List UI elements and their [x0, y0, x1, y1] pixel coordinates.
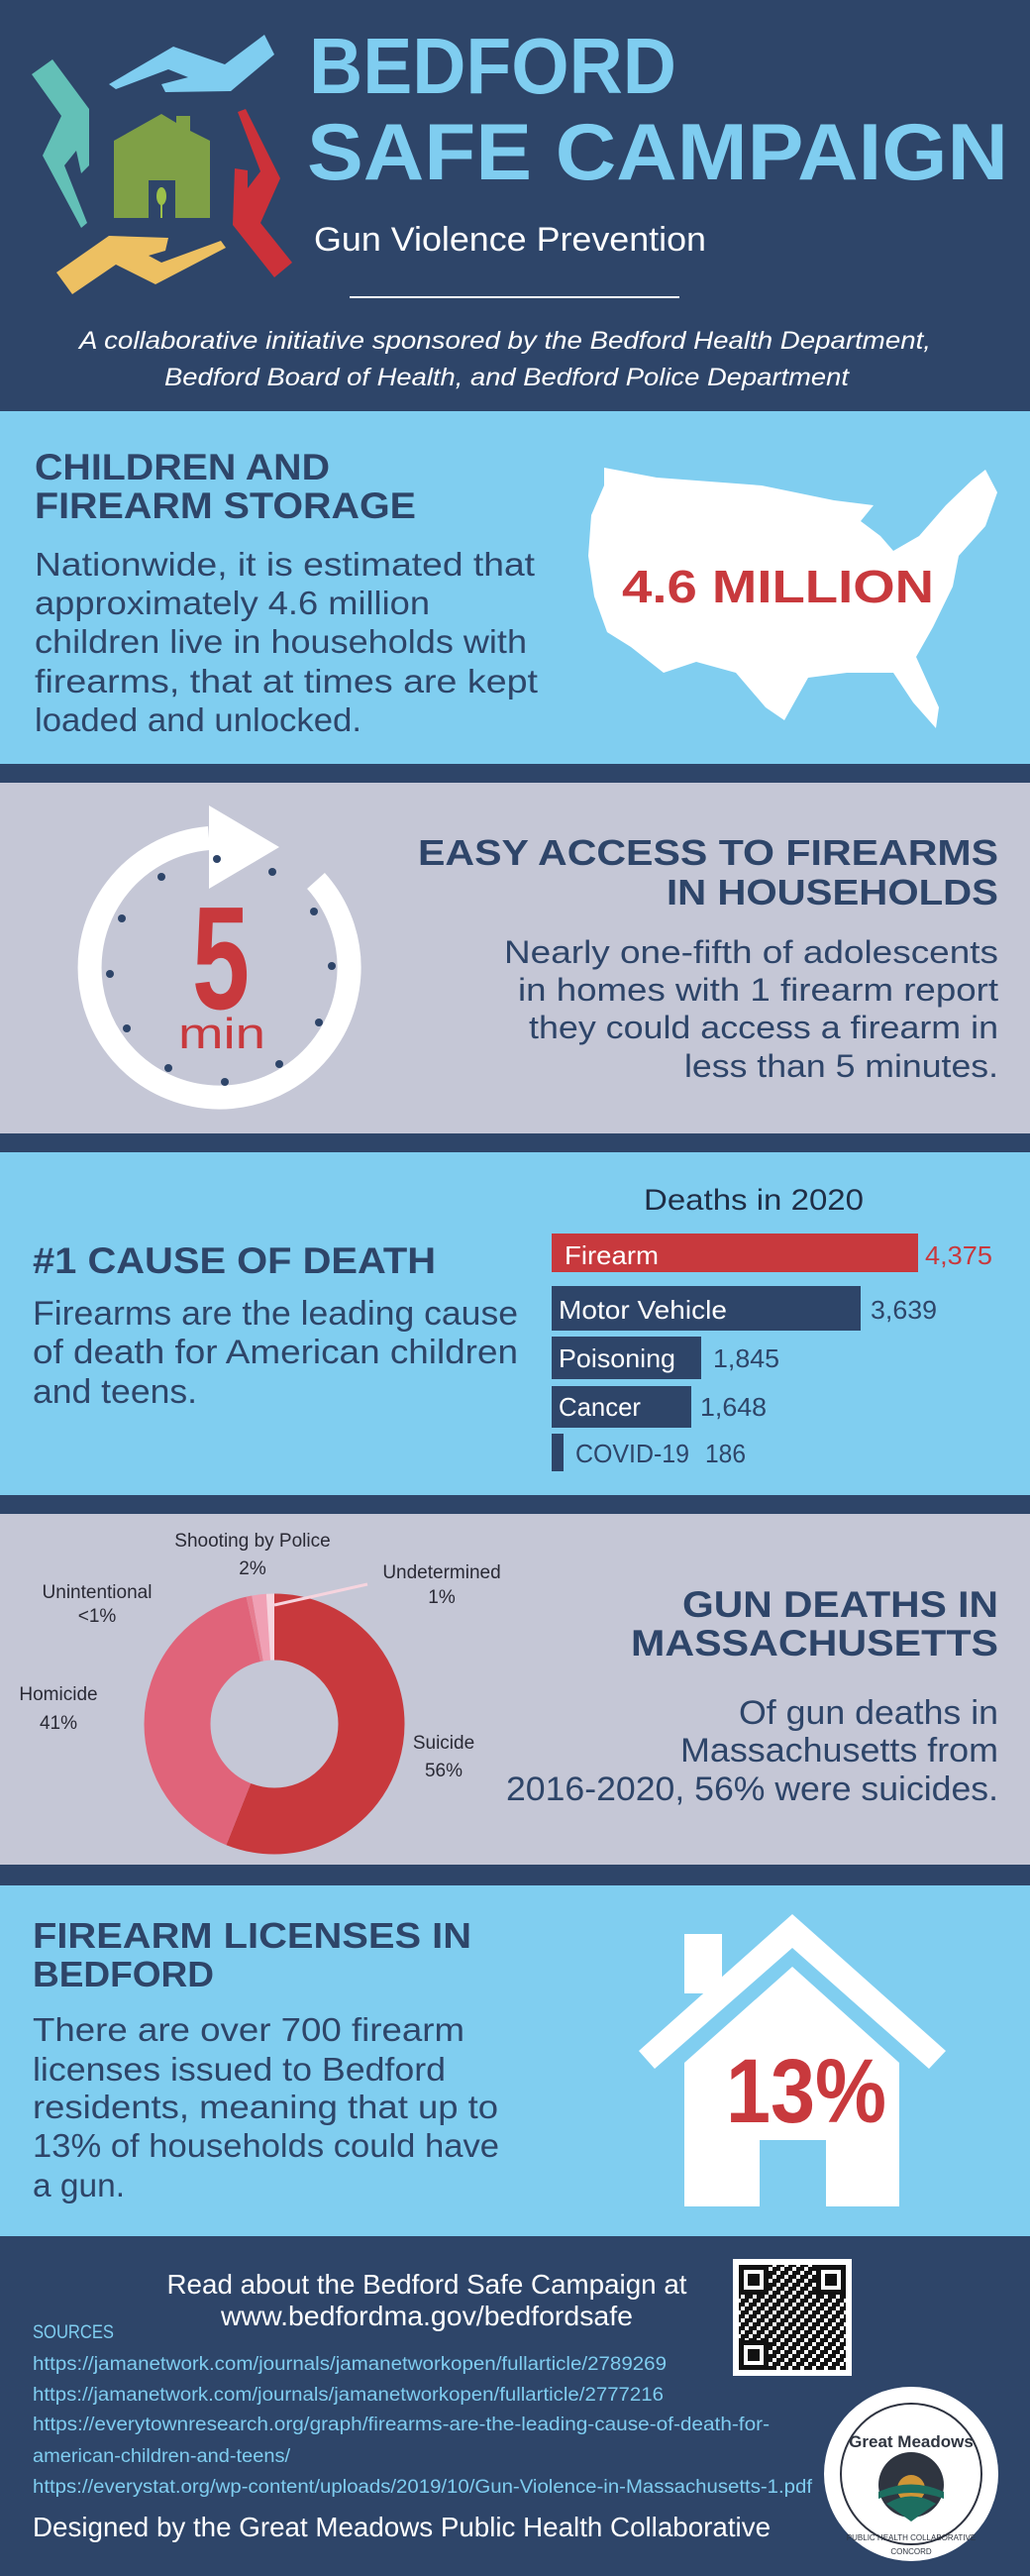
- donut chart: <1%: [78, 1606, 116, 1627]
- QR code: [733, 2259, 852, 2376]
- body text: and teens.: [33, 1373, 197, 1411]
- sources: https://everytownresearch.org/graph/firearms-are-the-leading-cause-of-death-for-: [33, 2415, 770, 2435]
- sponsor text: [77, 327, 931, 391]
- body text: in homes with 1 firearm report: [518, 972, 998, 1008]
- body text: [33, 2011, 499, 2203]
- donut chart: Homicide: [19, 1684, 98, 1705]
- body text: they could access a firearm in: [529, 1010, 998, 1045]
- logo: Great Meadows: CONCORD: [890, 2547, 932, 2556]
- heading: BEDFORD: [33, 1954, 214, 1994]
- sources: https://jamanetwork.com/journals/jamanetworkopen/fullarticle/2789269: [33, 2354, 667, 2375]
- sources: [33, 2322, 813, 2498]
- title: BEDFORD: [309, 22, 676, 110]
- heading: FIREARM LICENSES IN: [33, 1915, 471, 1956]
- body text: loaded and unlocked.: [35, 701, 361, 738]
- body text: Nationwide, it is estimated that: [35, 546, 535, 583]
- icon: house with 13%: [639, 1914, 946, 2206]
- credit: Designed by the Great Meadows Public Health Collaborative: [33, 2512, 771, 2542]
- bar chart: deaths in 2020: Cancer: [559, 1392, 641, 1422]
- icon: 5 minute timer: [90, 805, 350, 1098]
- heading: CHILDREN AND: [35, 447, 330, 487]
- body text: a gun.: [33, 2167, 125, 2203]
- website callout: www.bedfordma.gov/bedfordsafe: [220, 2301, 633, 2331]
- logo: hands and house: [32, 35, 292, 294]
- bar chart: deaths in 2020: Motor Vehicle: [559, 1295, 727, 1325]
- sources: https://jamanetwork.com/journals/jamanetworkopen/fullarticle/2777216: [33, 2385, 664, 2406]
- logo: Great Meadows: [824, 2387, 998, 2561]
- bar chart: deaths in 2020: Firearm: [565, 1240, 659, 1270]
- donut chart: 1%: [428, 1587, 456, 1608]
- donut chart: Undetermined: [382, 1562, 501, 1583]
- body text: residents, meaning that up to: [33, 2089, 498, 2125]
- donut chart: 41%: [40, 1713, 77, 1734]
- sources: https://everystat.org/wp-content/uploads/2019/10/Gun-Violence-in-Massachusetts-1.pdf: [33, 2477, 813, 2498]
- heading: FIREARM STORAGE: [35, 485, 416, 526]
- bar chart: deaths in 2020: 1,845: [713, 1343, 779, 1373]
- heading: [631, 1584, 998, 1664]
- bar chart: deaths in 2020: 186: [705, 1439, 746, 1468]
- body text: Nearly one-fifth of adolescents: [504, 934, 998, 970]
- heading: IN HOUSEHOLDS: [667, 872, 998, 912]
- bar chart: deaths in 2020: Poisoning: [559, 1343, 675, 1373]
- title: SAFE CAMPAIGN: [307, 108, 1008, 197]
- heading: #1 CAUSE OF DEATH: [33, 1240, 436, 1281]
- logo: Great Meadows: Great Meadows: [849, 2432, 974, 2451]
- icon: US map: [588, 468, 997, 728]
- donut chart: Shooting by Police: [174, 1531, 331, 1552]
- body text: firearms, that at times are kept: [35, 663, 538, 699]
- body text: [504, 934, 998, 1084]
- icon: 5 minute timer: min: [178, 1010, 265, 1058]
- donut chart: Suicide: [413, 1733, 474, 1754]
- heading: GUN DEATHS IN: [682, 1584, 998, 1625]
- logo: Great Meadows: PUBLIC HEALTH COLLABORATIVE: [847, 2533, 976, 2542]
- icon: house with 13%: 13%: [726, 2041, 886, 2142]
- sources: SOURCES: [33, 2322, 114, 2343]
- sponsor text: Bedford Board of Health, and Bedford Police Department: [164, 364, 850, 391]
- body text: approximately 4.6 million: [35, 585, 430, 621]
- body text: licenses issued to Bedford: [33, 2051, 446, 2088]
- donut chart: [19, 1531, 501, 1821]
- panel: cause of death: [0, 1152, 1030, 1495]
- donut chart: Unintentional: [43, 1582, 152, 1603]
- bar chart: deaths in 2020: Deaths in 2020: [644, 1184, 864, 1217]
- body text: [506, 1694, 998, 1808]
- body text: 13% of households could have: [33, 2127, 499, 2164]
- icon: 5 minute timer: 5: [192, 877, 250, 1040]
- heading: EASY ACCESS TO FIREARMS: [418, 832, 998, 873]
- bar chart: deaths in 2020: 3,639: [871, 1295, 937, 1325]
- body text: children live in households with: [35, 623, 527, 660]
- body text: [35, 546, 538, 738]
- body text: There are over 700 firearm: [33, 2011, 464, 2048]
- website callout: [166, 2269, 687, 2331]
- donut chart: 2%: [239, 1558, 266, 1579]
- panel: firearm licenses in bedford: [0, 1885, 1030, 2236]
- body text: Massachusetts from: [680, 1732, 998, 1770]
- panel: gun deaths in massachusetts: [0, 1514, 1030, 1865]
- body text: Of gun deaths in: [739, 1694, 998, 1732]
- donut chart: 56%: [425, 1761, 463, 1781]
- heading: [33, 1915, 471, 1994]
- body text: less than 5 minutes.: [684, 1048, 998, 1084]
- footer: [0, 2236, 1030, 2576]
- subtitle: Gun Violence Prevention: [314, 221, 706, 259]
- bar chart: deaths in 2020: COVID-19: [575, 1439, 689, 1468]
- bar chart: deaths in 2020: 1,648: [700, 1392, 767, 1422]
- body text: 2016-2020, 56% were suicides.: [506, 1771, 998, 1808]
- bar chart: deaths in 2020: 4,375: [925, 1240, 992, 1270]
- body text: Firearms are the leading cause: [33, 1295, 518, 1333]
- body text: [33, 1295, 518, 1411]
- header panel: [0, 0, 1030, 411]
- heading: [418, 832, 998, 912]
- sponsor text: A collaborative initiative sponsored by the Bedford Health Department,: [77, 327, 931, 355]
- website callout: Read about the Bedford Safe Campaign at: [166, 2269, 687, 2300]
- body text: of death for American children: [33, 1334, 518, 1371]
- bar chart: deaths in 2020: [552, 1184, 992, 1471]
- heading: [35, 447, 416, 526]
- panel: easy access: [0, 783, 1030, 1133]
- panel: children and firearm storage: [0, 411, 1030, 764]
- sources: american-children-and-teens/: [33, 2446, 291, 2467]
- heading: MASSACHUSETTS: [631, 1623, 998, 1664]
- stat: 4.6 million: 4.6 MILLION: [622, 561, 934, 612]
- title: [307, 22, 1008, 197]
